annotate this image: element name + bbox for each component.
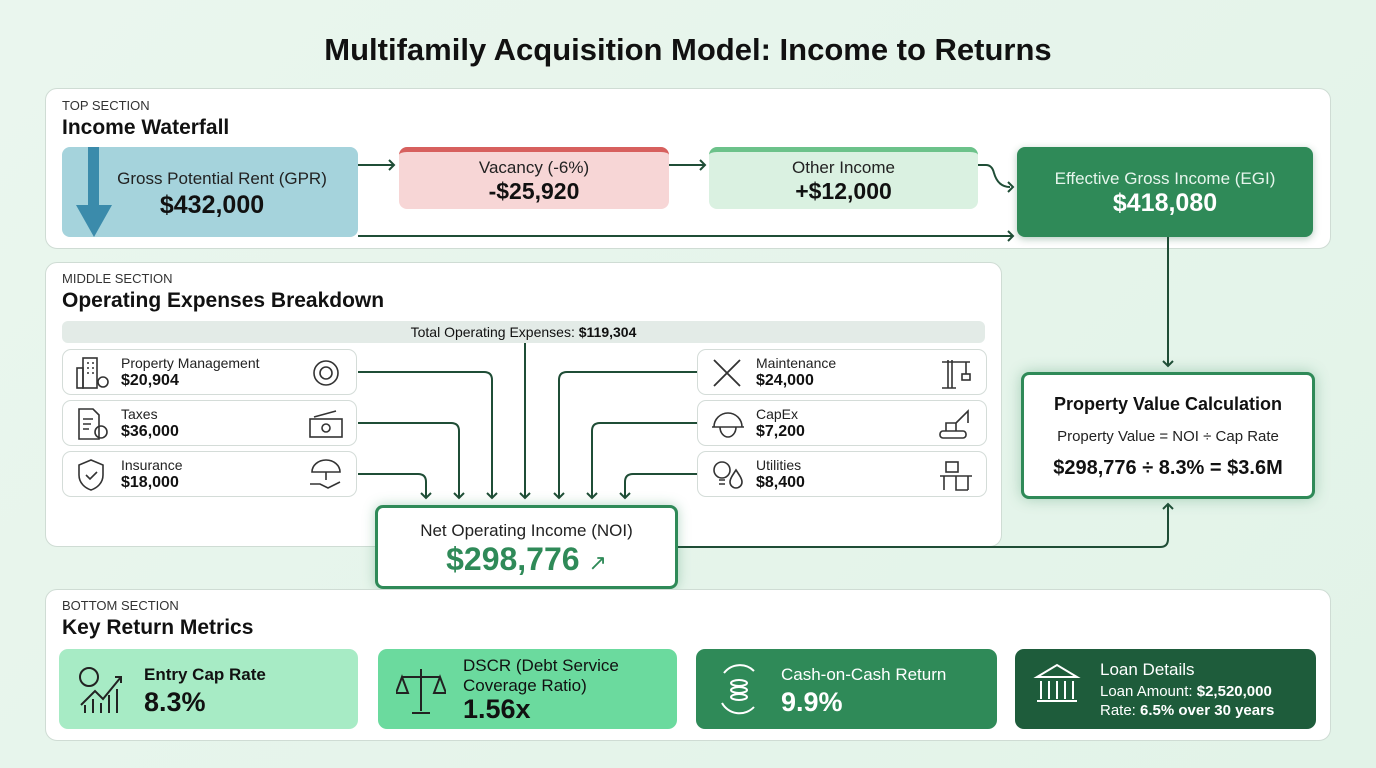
box: other income: Other Income: [792, 158, 895, 177]
box: gross potential rent: Gross Potential Rent (GPR): [117, 169, 327, 188]
card: insurance: $18,000: [121, 474, 179, 491]
metric: entry cap rate: Entry Cap Rate: [144, 665, 266, 684]
box: effective gross income: Effective Gross Income (EGI): [1055, 169, 1275, 188]
box: gross potential rent: $432,000: [160, 191, 264, 219]
card: maintenance: [697, 349, 987, 395]
card: maintenance: $24,000: [756, 372, 814, 389]
card: taxes: $36,000: [121, 423, 179, 440]
box: other income: +$12,000: [795, 178, 892, 204]
metric: dscr: Coverage Ratio): [463, 676, 587, 695]
box: other income: [709, 147, 978, 209]
total operating expenses bar: Total Operating Expenses: $119,304: [411, 324, 636, 340]
metric: loan details: [1015, 649, 1316, 729]
box: property value calculation: Property Value Calculation: [1054, 394, 1282, 414]
box: property value calculation: Property Value = NOI ÷ Cap Rate: [1057, 428, 1279, 445]
metric: dscr: 1.56x: [463, 694, 531, 724]
box: vacancy: [399, 147, 669, 209]
panel: middle section: MIDDLE SECTION: [62, 271, 173, 286]
card: utilities: [697, 451, 987, 497]
panel: bottom section: [45, 589, 1331, 741]
card: property management: $20,904: [121, 372, 179, 389]
box: property value calculation: [1021, 372, 1315, 499]
card: capex: [697, 400, 987, 446]
box: net operating income: [375, 505, 678, 589]
card: capex: $7,200: [756, 423, 805, 440]
metric: entry cap rate: [59, 649, 358, 729]
card: insurance: [62, 451, 357, 497]
box: net operating income: $298,776 ↗: [446, 541, 607, 577]
metric: loan details: Rate: 6.5% over 30 years: [1100, 702, 1274, 719]
card: capex: CapEx: [756, 406, 798, 422]
metric: cash-on-cash return: 9.9%: [781, 687, 843, 717]
metric: dscr: DSCR (Debt Service: [463, 656, 619, 675]
card: taxes: [62, 400, 357, 446]
card: property management: [62, 349, 357, 395]
panel: bottom section: Key Return Metrics: [62, 616, 253, 639]
card: maintenance: Maintenance: [756, 355, 836, 371]
box: net operating income: Net Operating Income (NOI): [420, 521, 633, 540]
metric: cash-on-cash return: [696, 649, 997, 729]
box: effective gross income: [1017, 147, 1313, 237]
panel: bottom section: BOTTOM SECTION: [62, 598, 179, 613]
metric: loan details: Loan Details: [1100, 660, 1195, 679]
box: vacancy: Vacancy (-6%): [479, 158, 589, 177]
metric: loan details: Loan Amount: $2,520,000: [1100, 683, 1272, 700]
card: taxes: Taxes: [121, 406, 158, 422]
card: insurance: Insurance: [121, 457, 182, 473]
panel: top section: [45, 88, 1331, 249]
box: vacancy: -$25,920: [489, 178, 579, 204]
metric: entry cap rate: 8.3%: [144, 687, 206, 717]
card: property management: Property Management: [121, 355, 260, 371]
panel: middle section: [45, 262, 1002, 547]
panel: top section: TOP SECTION: [62, 98, 150, 113]
panel: middle section: Operating Expenses Breakdown: [62, 289, 384, 312]
metric: cash-on-cash return: Cash-on-Cash Return: [781, 665, 946, 684]
title: Multifamily Acquisition Model: Income to Returns: [324, 32, 1052, 67]
panel: top section: Income Waterfall: [62, 116, 229, 139]
total operating expenses bar: [62, 321, 985, 343]
box: gross potential rent: [62, 147, 358, 237]
box: property value calculation: $298,776 ÷ 8.3% = $3.6M: [1053, 457, 1283, 479]
card: utilities: $8,400: [756, 474, 805, 491]
card: utilities: Utilities: [756, 457, 801, 473]
metric: dscr: [378, 649, 677, 729]
box: effective gross income: $418,080: [1113, 189, 1217, 217]
